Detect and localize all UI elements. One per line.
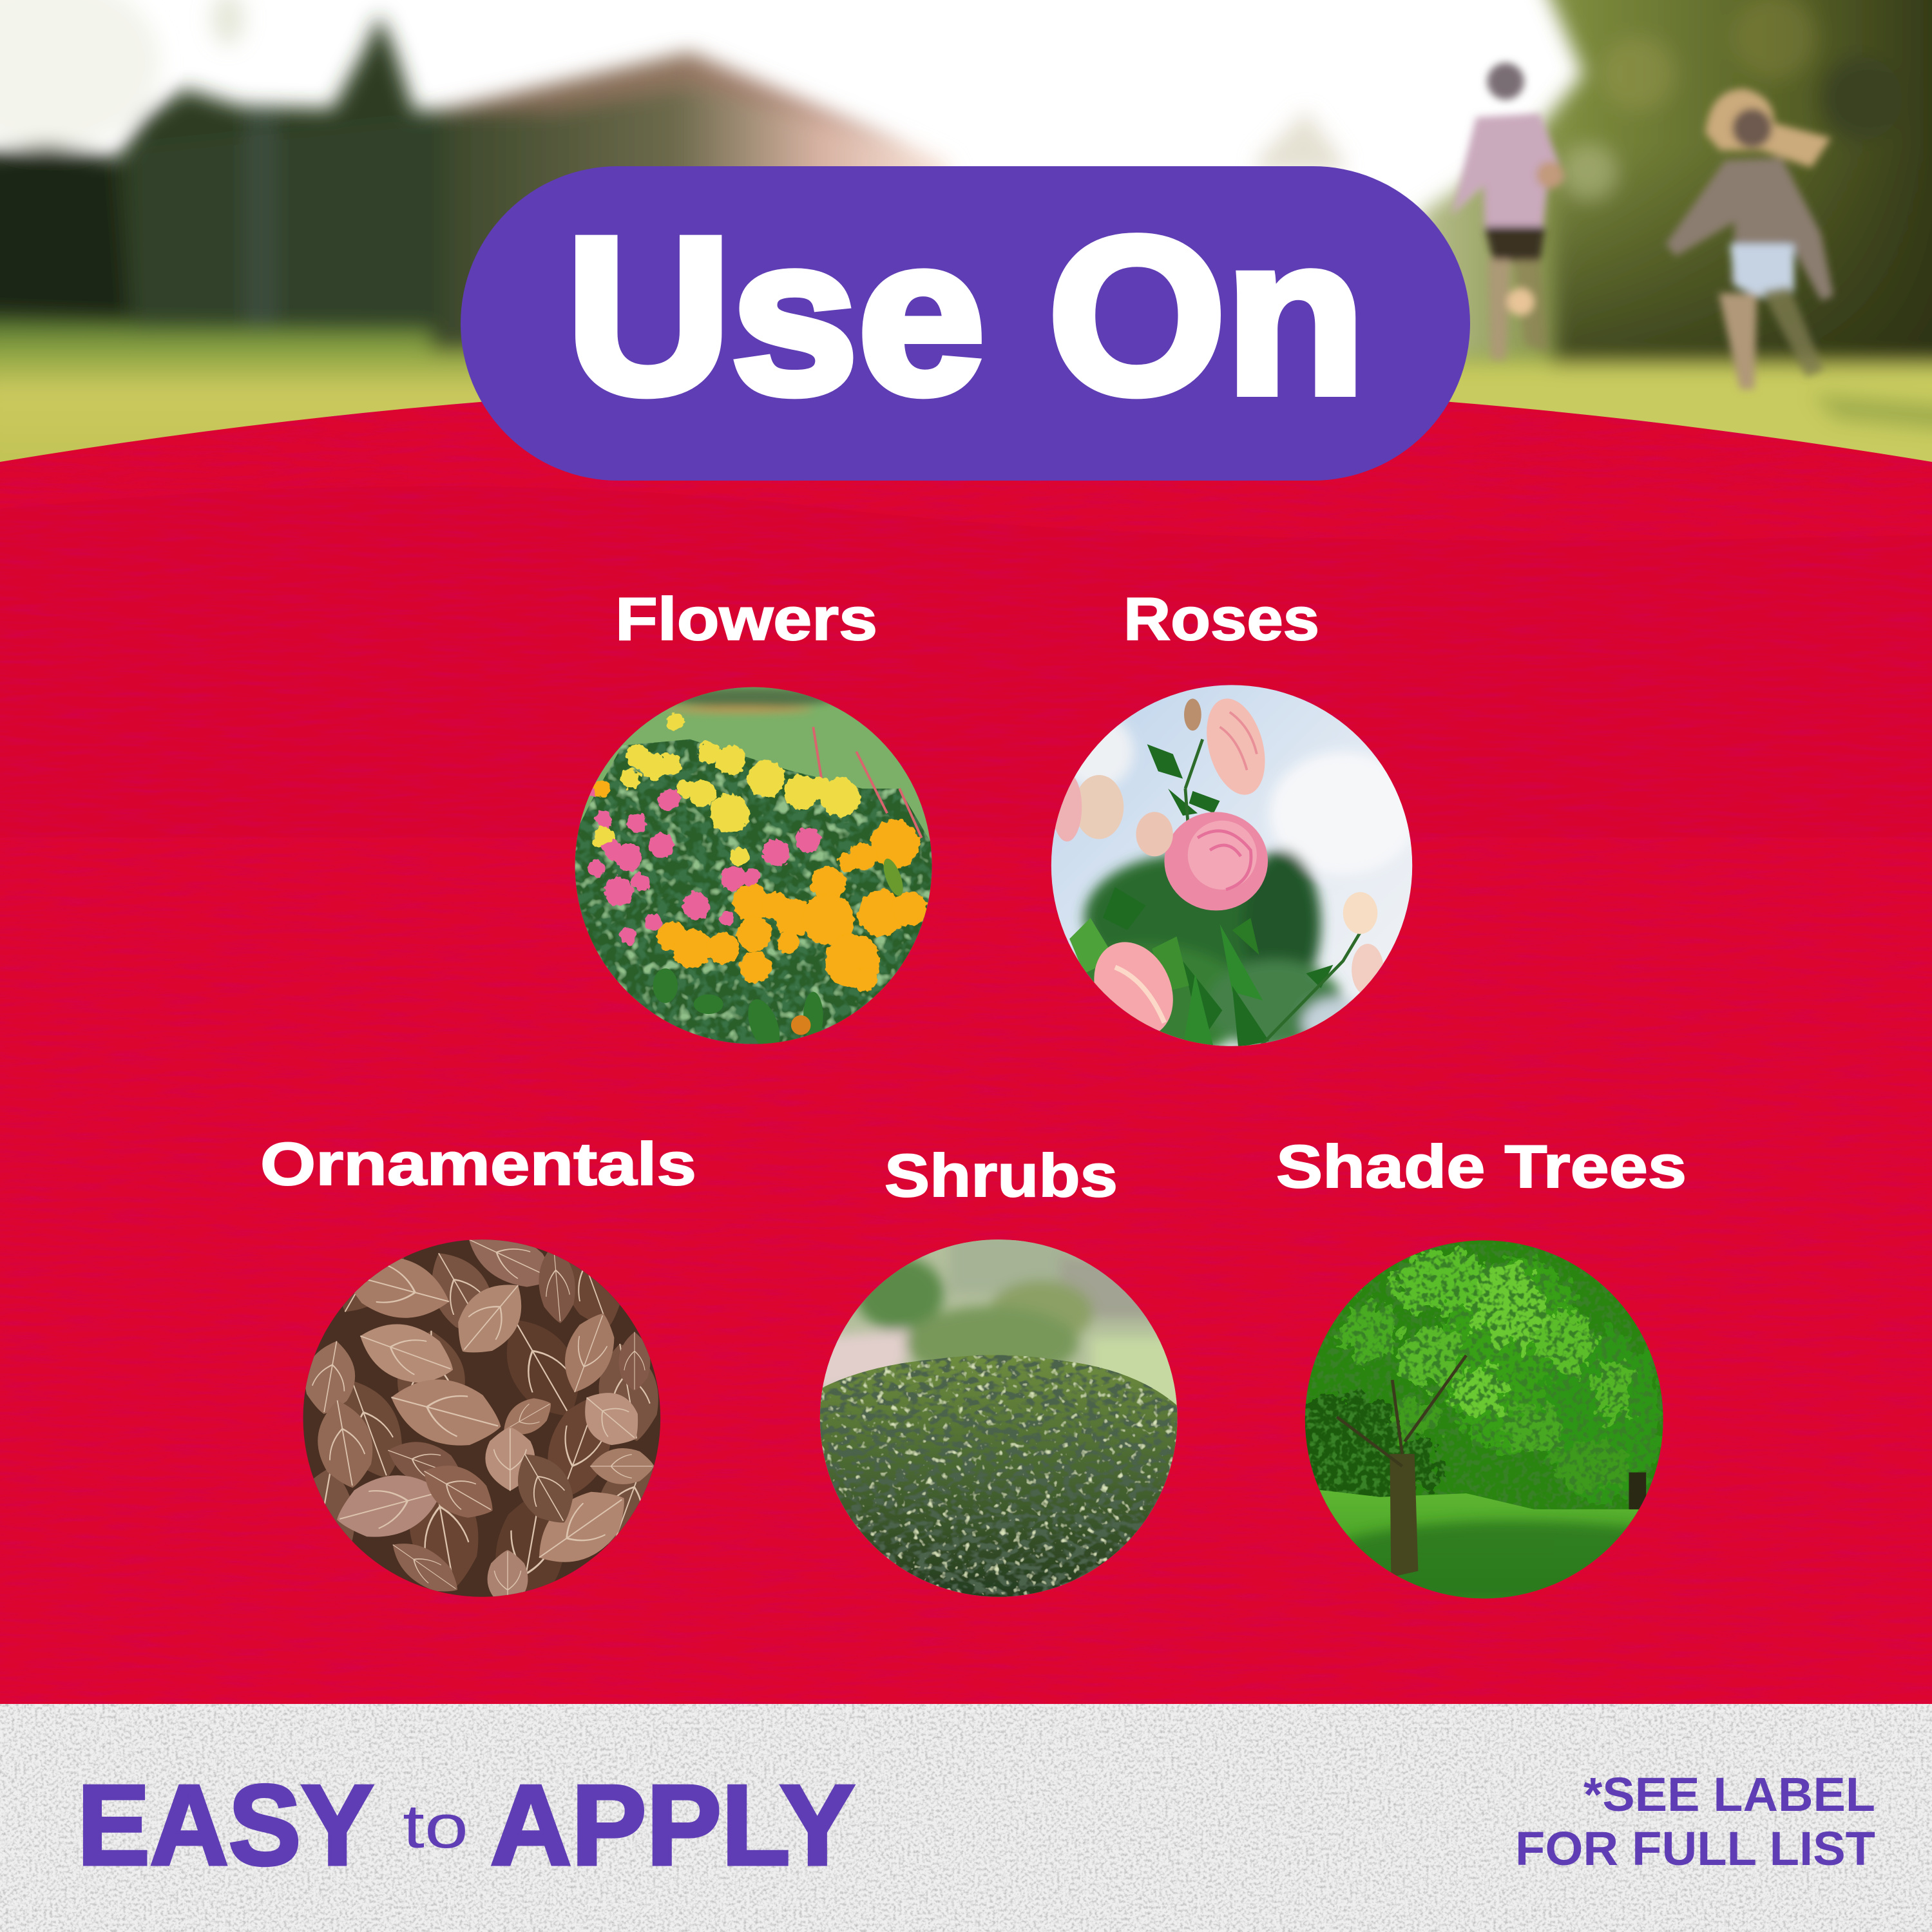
footnote: see label for full list: FOR FULL LIST: [1515, 1822, 1875, 1875]
footnote: see label for full list: *SEE LABEL: [1583, 1768, 1875, 1821]
dark hedge: [0, 150, 129, 318]
house: [431, 52, 973, 351]
title text: Use On: [566, 192, 1365, 440]
left tree line: [0, 15, 591, 332]
lawn: [0, 318, 1932, 493]
label: Flowers: Flowers: [615, 585, 877, 653]
photo: shade tree: [1281, 1232, 1670, 1608]
photo: flowers: [575, 687, 932, 1044]
footnote: see label for full list: [1515, 1768, 1875, 1875]
label: Roses: Roses: [1124, 585, 1319, 653]
hero photo: blurred lawn with house and running children: [0, 0, 1932, 501]
right tree mass: [1417, 0, 1932, 365]
footer headline: easy to apply: [77, 1761, 855, 1889]
running child right: [1666, 89, 1833, 389]
photo: shrubs: [813, 1232, 1189, 1602]
title pill: [461, 166, 1470, 481]
label: Shade Trees: Shade Trees: [1276, 1133, 1687, 1200]
footer headline: easy to apply: APPLY: [490, 1761, 855, 1889]
footer headline: easy to apply: EASY: [77, 1761, 374, 1889]
label: Shrubs: Shrubs: [885, 1142, 1118, 1209]
running child left: [1451, 63, 1565, 359]
photo: ornamentals: [303, 1239, 661, 1597]
bottom panel: plaster texture: [0, 1704, 1932, 1932]
red painted panel: [0, 402, 1932, 1704]
photo: roses: [1041, 682, 1417, 1064]
label: Ornamentals: Ornamentals: [260, 1130, 696, 1198]
footer headline: easy to apply: to: [403, 1792, 468, 1861]
